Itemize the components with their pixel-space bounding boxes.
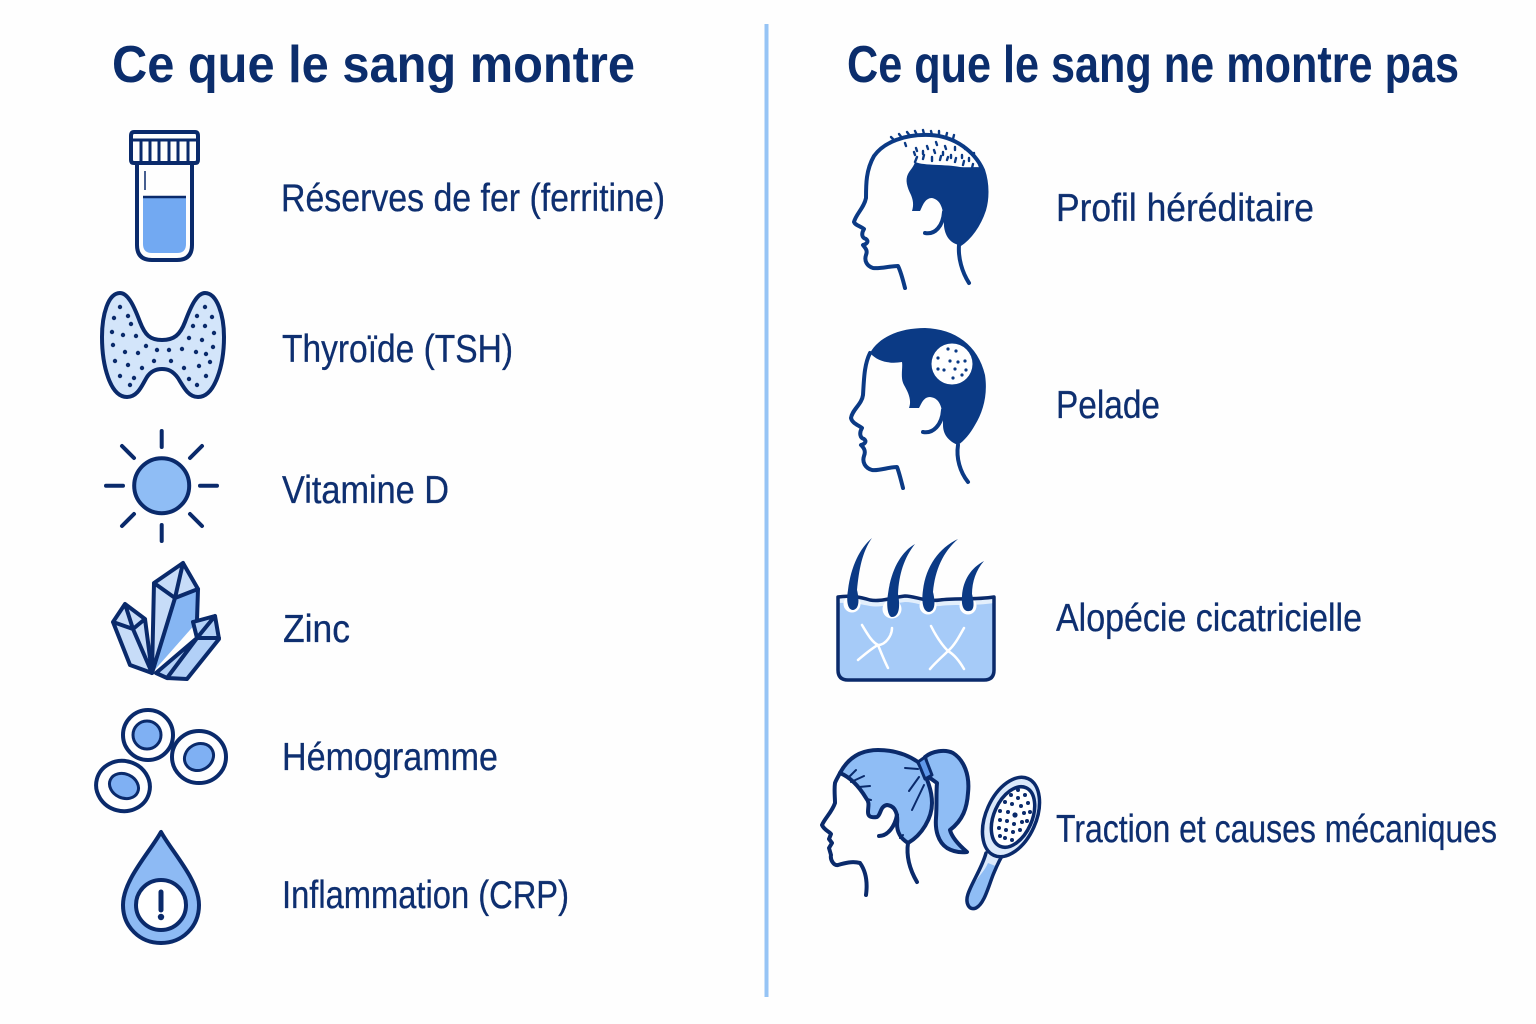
label: CRP: Inflammation (CRP)	[282, 874, 569, 917]
label: thyroide: Thyroïde (TSH)	[282, 328, 513, 371]
panel: ce que le sang ne montre pas	[822, 36, 1497, 909]
icon: sun	[106, 431, 217, 541]
heading: left: Ce que le sang montre	[112, 36, 635, 94]
icon: head with hereditary thinning	[854, 130, 986, 288]
label: vitamine D: Vitamine D	[282, 469, 449, 512]
item: CRP	[123, 832, 569, 943]
icon: blood cells	[90, 710, 226, 817]
item: pelade	[851, 328, 1160, 488]
icon: thyroid	[102, 293, 224, 397]
item: vitamine D	[106, 431, 449, 541]
label: zinc: Zinc	[283, 608, 350, 651]
item: ferritine	[131, 132, 665, 260]
icon: head with alopecia patch	[851, 328, 986, 488]
item: zinc	[113, 563, 350, 679]
icon: crystals	[113, 563, 219, 679]
item: traction et causes mecaniques	[822, 750, 1497, 909]
icon: scalp cross-section	[838, 538, 994, 680]
icon: test tube	[131, 132, 198, 260]
label: profil hereditaire: Profil héréditaire	[1056, 187, 1314, 230]
icon: drop with warning	[123, 832, 199, 943]
label: alopecie cicatricielle: Alopécie cicatricielle	[1056, 597, 1362, 640]
item: thyroide	[102, 293, 513, 397]
label: ferritine: Réserves de fer (ferritine)	[281, 177, 665, 220]
icon: ponytail profile	[822, 750, 968, 895]
icon: hairbrush	[967, 768, 1051, 909]
label: pelade: Pelade	[1056, 384, 1160, 427]
item: profil hereditaire	[854, 130, 1314, 288]
label: hemogramme: Hémogramme	[282, 736, 498, 779]
item: alopecie cicatricielle	[838, 538, 1362, 680]
panel: ce que le sang montre	[90, 36, 665, 943]
item: hemogramme	[90, 710, 498, 817]
